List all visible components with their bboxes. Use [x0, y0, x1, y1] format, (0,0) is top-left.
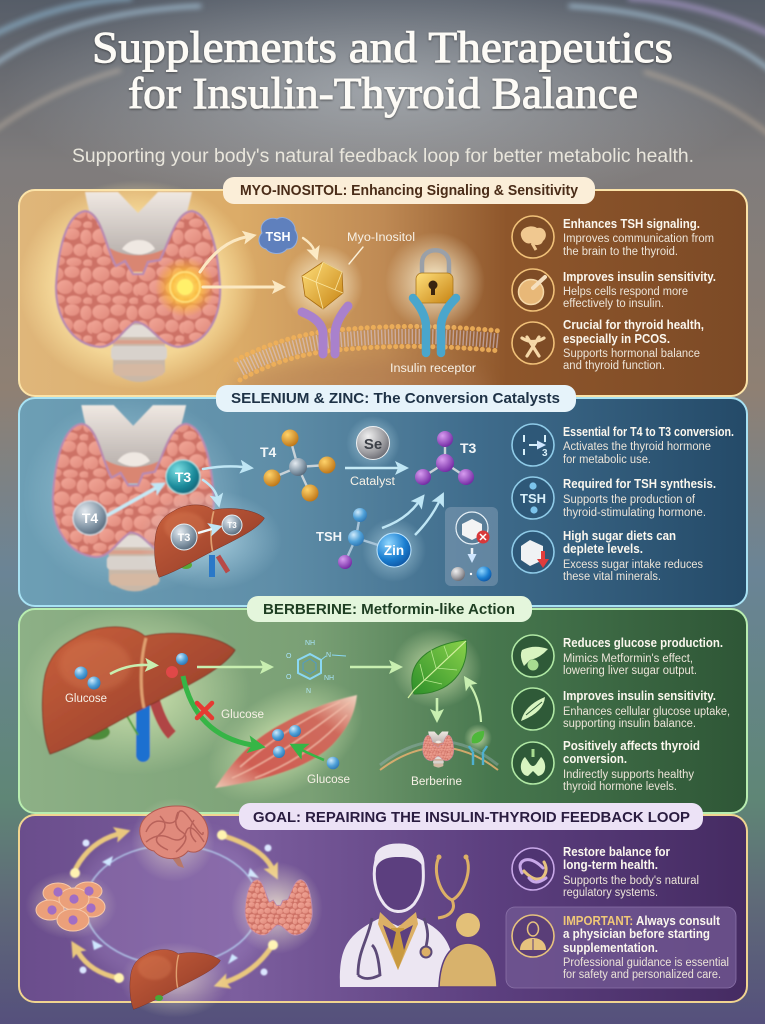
benefit: improves insulin sensitivity: Improves insulin sensitivity.: [563, 270, 716, 284]
callout: important: IMPORTANT: Always consult: [563, 914, 721, 928]
benefit: improves insulin sensitivity: Enhances cellular glucose uptake,: [563, 706, 730, 718]
benefit: positively affects thyroid conversion: conversion.: [563, 752, 627, 766]
benefit: positively affects thyroid conversion: thyroid hormone levels.: [563, 781, 677, 793]
benefit: T4 to T3 conversion: [512, 424, 734, 466]
cells cluster: [25, 871, 117, 939]
benefit: crucial for thyroid health: Crucial for thyroid health,: [563, 318, 704, 332]
T4 molecule: [260, 430, 336, 502]
small thyroid with membrane and berberine label: Berberine: [411, 776, 462, 788]
benefit: high sugar diets: High sugar diets can: [563, 529, 676, 543]
benefit: crucial for thyroid health: Supports hormonal balance: [563, 348, 700, 360]
berberine chemical structure: O: [286, 653, 292, 660]
selenium catalyst: Se: [364, 436, 382, 453]
benefit: improves insulin sensitivity: effectively to insulin.: [563, 298, 664, 310]
benefit: improves insulin sensitivity: [512, 269, 716, 311]
doctor and patient icon: [340, 845, 497, 987]
T3 molecule: [415, 431, 477, 485]
T4 and T3 ball labels: [82, 469, 191, 526]
selenium catalyst: [345, 416, 400, 488]
benefit: T4 to T3 conversion: 3: [542, 448, 548, 459]
brain: [131, 798, 215, 882]
benefit: reduces glucose production: Mimics Metformin's effect,: [563, 653, 693, 665]
benefit: high sugar diets: Excess sugar intake reduces: [563, 559, 703, 571]
heading: myo-inositol: MYO-INOSITOL: Enhancing Signaling & Sensitivity: [240, 182, 579, 199]
TSH molecule: [259, 217, 297, 254]
padlock on blue insulin receptor: [385, 232, 485, 353]
heading: goal: [239, 803, 703, 830]
arrows from thyroid to TSH and crystal: [200, 237, 363, 287]
heading: selenium and zinc: SELENIUM & ZINC: The Conversion Catalysts: [231, 390, 560, 407]
callout: important: a physician before starting: [563, 927, 710, 941]
label: insulin receptor: Insulin receptor: [390, 363, 476, 375]
benefit: T4 to T3 conversion: Essential for T4 to T3 conversion.: [563, 425, 734, 439]
benefit: TSH synthesis: [512, 477, 716, 519]
heading: berberine: BERBERINE: Metformin-like Action: [263, 601, 515, 618]
liver with T3: T3: [178, 532, 190, 544]
benefit: positively affects thyroid conversion: Positively affects thyroid: [563, 739, 700, 753]
benefit: reduces glucose production: [512, 635, 723, 677]
benefit: enhances TSH signaling: Enhances TSH signaling.: [563, 217, 700, 231]
benefit: restore balance: long-term health.: [563, 858, 658, 872]
T4 molecule: T4: [260, 444, 277, 460]
benefit: improves insulin sensitivity: supporting insulin balance.: [563, 718, 696, 730]
benefit: TSH synthesis: thyroid-stimulating hormone.: [563, 507, 706, 519]
benefit: reduces glucose production: lowering liver sugar output.: [563, 665, 697, 677]
berberine leaf: [392, 628, 482, 708]
panel: myo-inositol: [18, 180, 747, 409]
benefit: restore balance: Restore balance for: [563, 845, 670, 859]
benefit: reduces glucose production: Reduces glucose production.: [563, 636, 723, 650]
TSH molecule and zinc: [316, 502, 439, 582]
benefit: TSH synthesis: Required for TSH synthesis.: [563, 477, 716, 491]
benefit: high sugar diets: deplete levels.: [563, 542, 643, 556]
arrow to leaf: [350, 666, 392, 668]
berberine chemical structure: N: [326, 652, 331, 659]
callout: important: [506, 907, 736, 988]
benefit: enhances TSH signaling: Improves communication from: [563, 233, 714, 245]
berberine chemical structure: N: [306, 688, 311, 695]
T4 and T3 ball labels: T4: [82, 510, 98, 526]
benefit: improves insulin sensitivity: Improves insulin sensitivity.: [563, 689, 716, 703]
title: for Insulin-Thyroid Balance: [128, 69, 638, 118]
berberine chemical structure: NH: [305, 640, 315, 647]
heading: selenium and zinc: [216, 385, 576, 412]
benefit: restore balance: [512, 845, 699, 899]
TSH molecule and zinc: TSH: [316, 529, 342, 544]
berberine chemical structure: NH: [324, 675, 334, 682]
callout: important: supplementation.: [563, 941, 658, 955]
T3 molecule: T3: [460, 440, 477, 456]
icon: physician: [512, 915, 554, 957]
purple receptor with gold crystal: [283, 245, 363, 354]
benefit: enhances TSH signaling: [512, 216, 714, 258]
panel: feedback loop goal: [19, 798, 747, 1018]
benefit: positively affects thyroid conversion: Indirectly supports healthy: [563, 769, 694, 781]
benefit: T4 to T3 conversion: for metabolic use.: [563, 454, 651, 466]
berberine chemical structure: O: [286, 674, 292, 681]
cell membrane: [236, 326, 500, 380]
thyroid illustration with T4 and T3: [23, 395, 243, 595]
heading: myo-inositol: [223, 177, 595, 204]
panel: berberine: [19, 605, 747, 828]
arrows from T3: [203, 466, 243, 497]
liver in loop: [120, 942, 230, 1018]
TSH molecule: TSH: [266, 230, 290, 244]
glucose balls in liver: Glucose: [65, 693, 107, 705]
liver with glucose: [20, 605, 250, 775]
benefit: T4 to T3 conversion: Activates the thyroid hormone: [563, 441, 711, 453]
title: [92, 23, 673, 118]
benefit: TSH synthesis: TSH: [520, 491, 546, 506]
glucose balls in muscle: [272, 725, 339, 769]
glucose balls in liver: [65, 653, 188, 705]
benefit: restore balance: Supports the body's natural: [563, 875, 699, 887]
sugar depletion mini panel: [445, 507, 498, 586]
callout: important: Professional guidance is essential: [563, 957, 729, 969]
TSH molecule and zinc: Zin: [384, 543, 404, 558]
liver with T3: T3: [227, 521, 237, 530]
arrow to chemical structure: [197, 666, 263, 668]
benefit: crucial for thyroid health: [512, 318, 704, 372]
T4 and T3 ball labels: T3: [175, 469, 191, 485]
benefit: improves insulin sensitivity: [512, 688, 730, 730]
benefit: positively affects thyroid conversion: [512, 739, 700, 793]
subtitle: Supporting your body's natural feedback loop for better metabolic health.: [72, 146, 694, 167]
benefit: high sugar diets: [512, 529, 703, 583]
benefit: restore balance: regulatory systems.: [563, 887, 658, 899]
blocked glucose arrow: [183, 676, 264, 745]
muscle with glucose: [186, 656, 384, 828]
label: glucose by muscle: Glucose: [307, 774, 350, 786]
benefit: crucial for thyroid health: especially in PCOS.: [563, 332, 670, 346]
panel: selenium and zinc: [19, 395, 747, 606]
heading: goal: GOAL: REPAIRING THE INSULIN-THYROID FEEDBACK LOOP: [253, 809, 690, 826]
liver with T3: [138, 490, 282, 590]
title: Supplements and Therapeutics: [92, 23, 673, 72]
blocked glucose arrow: Glucose: [221, 709, 264, 721]
callout: important: for safety and personalized care.: [563, 969, 721, 981]
benefit: crucial for thyroid health: and thyroid function.: [563, 360, 665, 372]
feedback loop diagram: [70, 830, 278, 986]
benefit: high sugar diets: these vital minerals.: [563, 571, 661, 583]
berberine chemical structure: [286, 640, 346, 695]
label: Myo-Inositol: Myo-Inositol: [347, 232, 415, 244]
heading: berberine: [247, 596, 532, 622]
selenium catalyst: Catalyst: [350, 476, 396, 488]
thyroid illustration with glow: [18, 180, 258, 390]
benefit: TSH synthesis: Supports the production of: [563, 494, 696, 506]
thyroid in loop: [231, 862, 323, 954]
benefit: enhances TSH signaling: the brain to the thyroid.: [563, 246, 678, 258]
small thyroid with membrane and berberine label: [380, 685, 498, 788]
benefit: improves insulin sensitivity: Helps cells respond more: [563, 286, 688, 298]
